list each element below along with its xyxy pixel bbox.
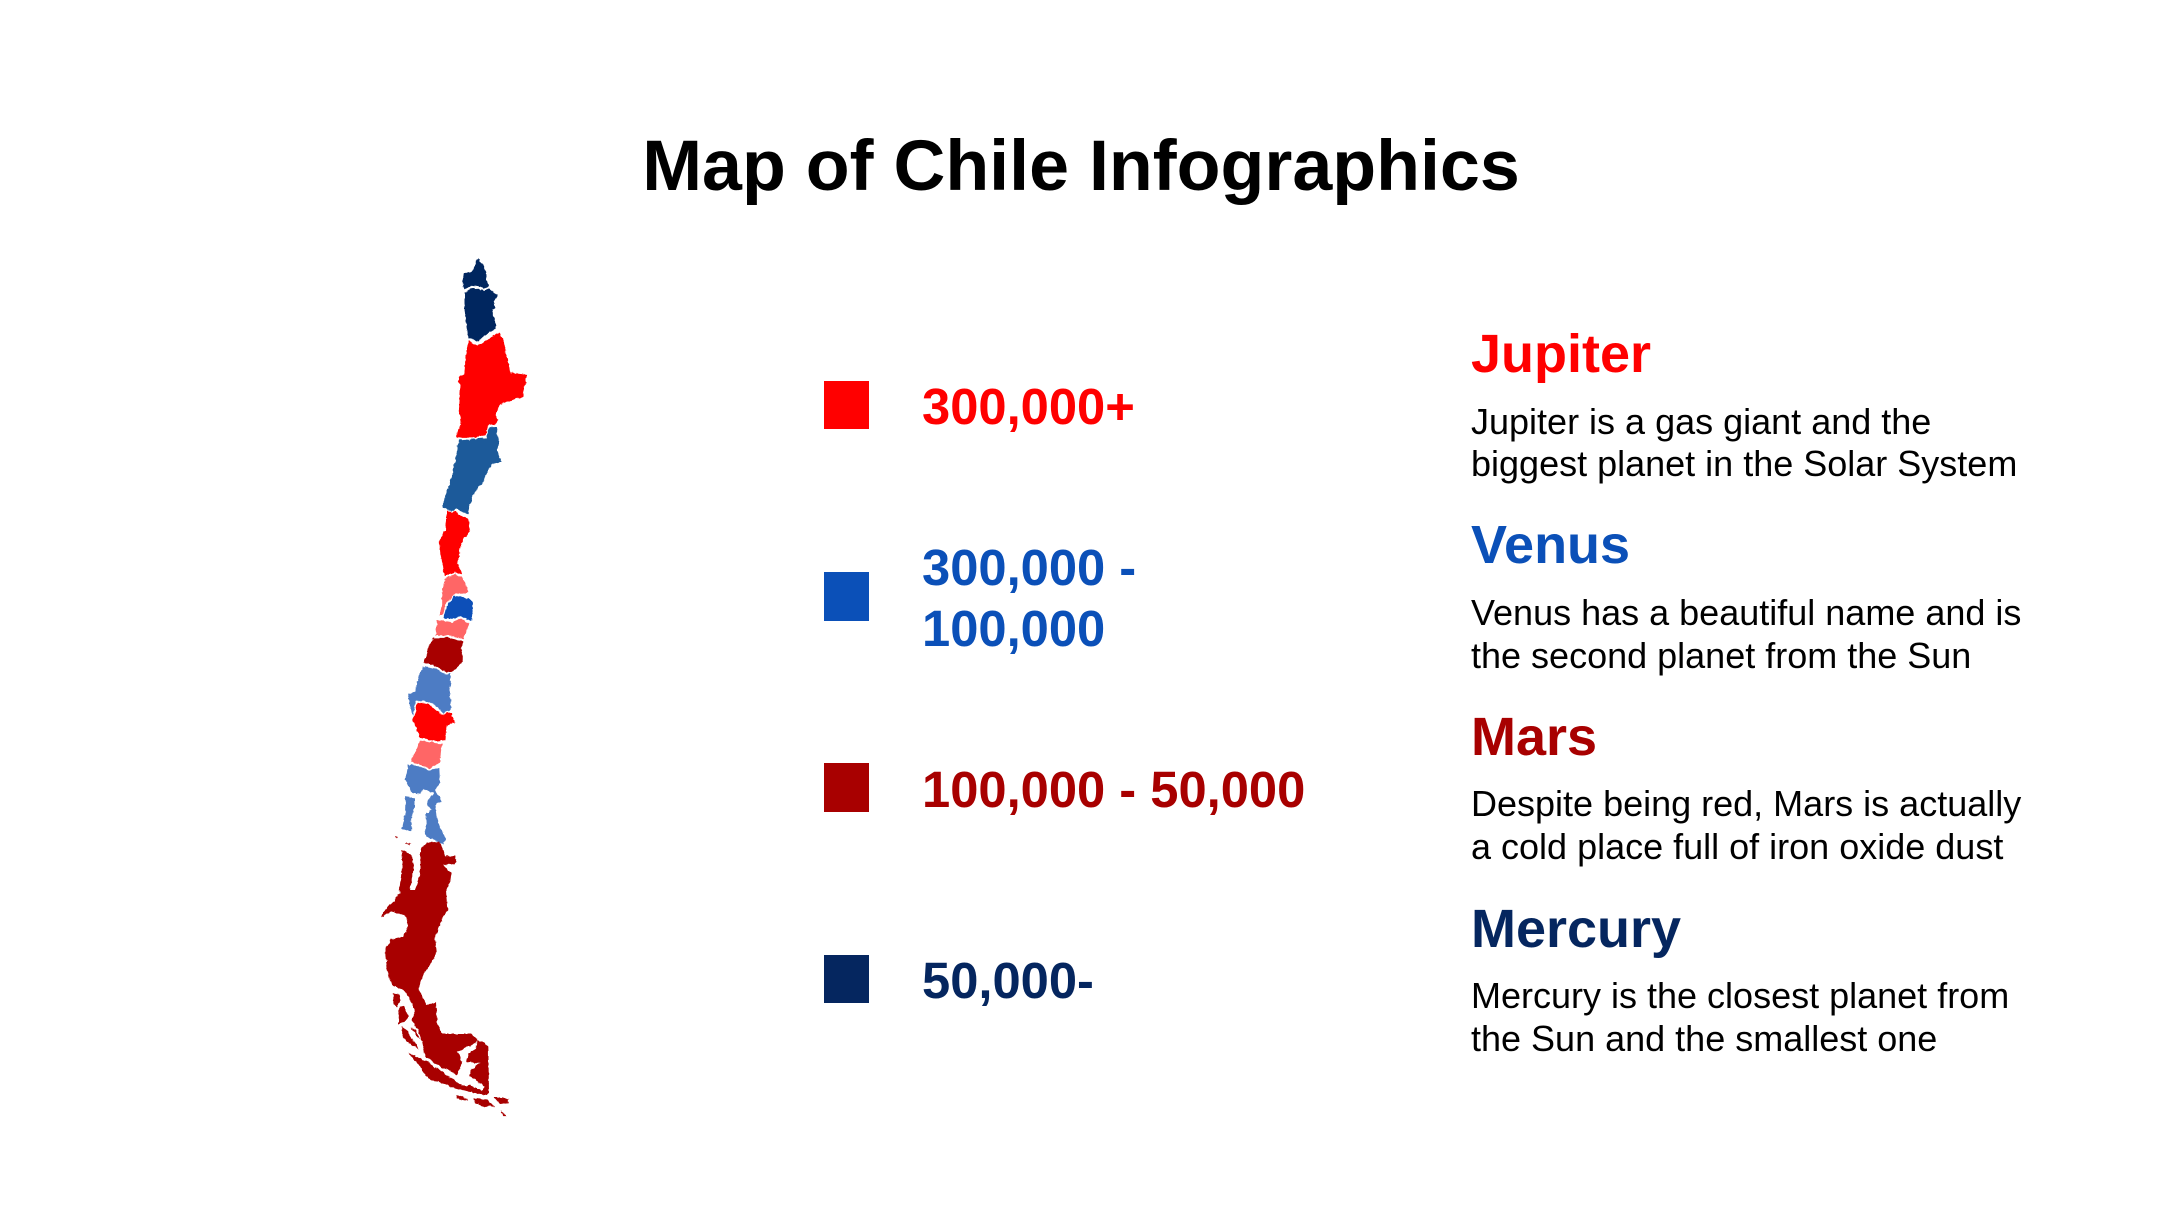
legend: 300,000 - 100,000: 300,000 - [922, 539, 1136, 596]
text block: Mercury: Mercury is the closest planet from [1471, 975, 2009, 1016]
legend: 300,000+ [824, 378, 1135, 435]
text block: Venus: the second planet from the Sun [1471, 635, 1971, 676]
title: Map of Chile Infographics [642, 126, 1520, 206]
text block: Venus: Venus [1471, 515, 1630, 575]
legend: 300,000 - 100,000: 100,000 [922, 600, 1105, 657]
text block: Mars: Mars [1471, 707, 1597, 767]
text block: Jupiter: biggest planet in the Solar System [1471, 443, 2017, 484]
legend: 50,000-: 50,000- [922, 952, 1094, 1009]
map of Chile [382, 258, 528, 1117]
legend: 300,000+: 300,000+ [922, 378, 1135, 435]
text block: Venus: Venus has a beautiful name and is [1471, 592, 2021, 633]
text block: Jupiter [1471, 324, 2017, 484]
text block: Jupiter: Jupiter [1471, 324, 1651, 384]
legend: 100,000 - 50,000: 100,000 - 50,000 [922, 761, 1305, 818]
text block: Mars [1471, 707, 2021, 867]
text block: Venus [1471, 515, 2021, 676]
text block: Mercury: the Sun and the smallest one [1471, 1018, 1937, 1059]
legend: 50,000- [824, 952, 1094, 1009]
text block: Mercury [1471, 899, 2009, 1059]
text block: Mars: a cold place full of iron oxide dust [1471, 826, 2003, 867]
text block: Mercury: Mercury [1471, 899, 1681, 959]
legend: 300,000 - 100,000 [824, 539, 1136, 657]
text block: Jupiter: Jupiter is a gas giant and the [1471, 401, 1931, 442]
text block: Mars: Despite being red, Mars is actually [1471, 783, 2021, 824]
